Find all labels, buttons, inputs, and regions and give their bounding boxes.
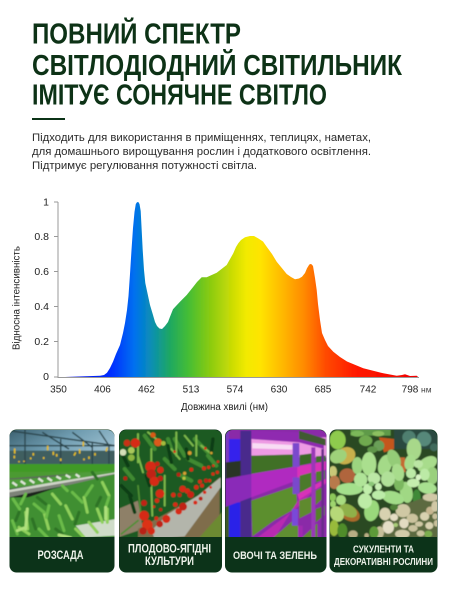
y tick labels: 0.6 (34, 266, 49, 278)
card: succulents and ornamentals (328, 429, 440, 572)
card: seedlings (9, 429, 116, 572)
title: ІМІТУЄ СОНЯЧНЕ СВІТЛО (32, 80, 327, 112)
y axis (54, 202, 58, 378)
x tick labels: 630 (271, 384, 288, 396)
y tick labels: 0.2 (34, 336, 49, 348)
photo: greenhouse seedlings (9, 429, 116, 539)
shelf 1 (226, 466, 293, 508)
dark plant (226, 461, 241, 479)
x tick labels: 685 (315, 384, 332, 396)
y tick labels: 1 (43, 196, 49, 208)
x tick labels: 462 (138, 384, 155, 396)
card: fruit and berry crops (118, 429, 223, 572)
description text: Підтримує регулювання потужності світла. (32, 160, 257, 172)
rosette 2 (394, 438, 440, 505)
card: vegetables and greens (224, 429, 328, 572)
left columns (226, 431, 230, 478)
x tick labels: 350 (50, 384, 67, 396)
top background (394, 429, 439, 449)
soil (118, 501, 143, 537)
photo: vertical farm (224, 429, 328, 539)
rosette 1 (336, 447, 406, 523)
x tick labels: 513 (183, 384, 200, 396)
x tick labels: 574 (227, 384, 244, 396)
label: seedlings: РОЗСАДА (38, 550, 84, 562)
background window (251, 437, 326, 457)
top beam (250, 436, 324, 450)
description text: Підходить для використання в приміщеннях, теплицях, наметах, (32, 132, 371, 144)
title underline (32, 118, 65, 120)
x tick labels: нм (421, 384, 432, 394)
vertical posts (293, 443, 299, 467)
spectrum chart (12, 196, 432, 413)
label: fruit and berry crops: ПЛОДОВО-ЯГІДНІ (128, 544, 211, 556)
y axis title: Відносна інтенсивність (12, 246, 22, 350)
y tick labels: 0.4 (34, 301, 49, 313)
x tick labels: 798 (402, 384, 419, 396)
plants row 1 (251, 454, 297, 474)
label: fruit and berry crops: КУЛЬТУРИ (145, 556, 194, 568)
spectrum curve (58, 202, 419, 378)
x axis (58, 376, 419, 378)
label: succulents and ornamentals: СУКУЛЕНТИ ТА (353, 544, 414, 556)
left plants (330, 431, 346, 449)
shelf 2 (258, 483, 326, 537)
x tick labels: 406 (94, 384, 111, 396)
plants row 2 (251, 486, 297, 536)
pebble plants (380, 492, 437, 537)
y tick labels: 0.8 (34, 231, 49, 243)
title: ПОВНИЙ СПЕКТР (32, 18, 241, 50)
x tick labels: 742 (360, 384, 377, 396)
description text: для домашнього вирощування рослин і додаткового освітлення. (32, 146, 371, 158)
y tick labels (34, 196, 49, 383)
x tick labels (50, 384, 432, 396)
label: vegetables and greens: ОВОЧІ ТА ЗЕЛЕНЬ (233, 550, 317, 562)
photo: tomatoes (118, 429, 223, 539)
y tick labels: 0 (43, 371, 49, 383)
x axis title: Довжина хвилі (нм) (181, 402, 268, 413)
title (32, 18, 403, 112)
description text (32, 132, 371, 172)
photo: succulents (328, 429, 440, 539)
plants row 3 (273, 521, 299, 537)
